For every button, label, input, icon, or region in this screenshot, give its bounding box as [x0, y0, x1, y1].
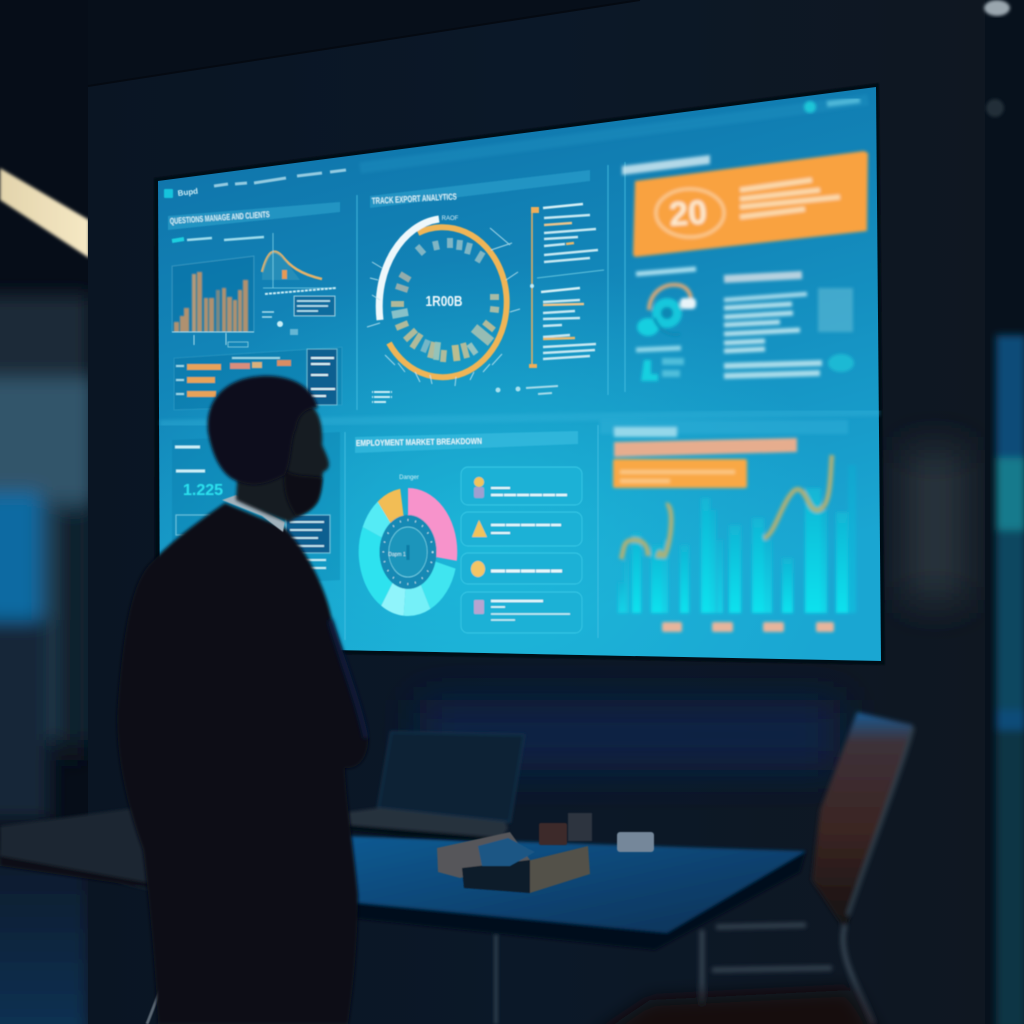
donut chart — [353, 481, 463, 623]
wall reflections — [420, 450, 965, 770]
notes block 2 — [541, 288, 596, 359]
panel: right text notes — [529, 204, 604, 368]
bars — [618, 465, 856, 613]
heading — [622, 155, 710, 175]
notes block 1 — [543, 204, 598, 262]
donut label: Danger — [399, 475, 419, 481]
list card 1 — [461, 467, 582, 505]
wall screen dashboard — [158, 87, 881, 661]
panel: bar chart with trend line — [600, 420, 856, 632]
top navigation bar — [164, 170, 346, 198]
right corridor — [984, 0, 1024, 1024]
cup — [539, 823, 567, 845]
candlestick bar chart — [172, 256, 254, 347]
icon: arc and cyan figure — [637, 285, 696, 336]
hair — [208, 376, 318, 484]
wall top shadow line — [88, 0, 640, 86]
gold trend line — [621, 455, 832, 559]
vertical dividers — [345, 162, 625, 640]
list card 2 — [461, 512, 582, 546]
man silhouette — [117, 376, 368, 1024]
ring heading: TRACK EXPORT ANALYTICS — [372, 192, 457, 206]
box with books — [437, 832, 530, 878]
panel: donut and list — [353, 431, 582, 633]
desk — [0, 806, 806, 1024]
outer ticks — [367, 228, 520, 386]
collar — [222, 495, 285, 532]
x axis labels — [662, 622, 834, 632]
pink caption — [614, 438, 797, 457]
panel heading — [168, 202, 340, 230]
chair leg behind man — [147, 983, 163, 1024]
panel: left upper analytics — [168, 202, 342, 410]
pen holder — [568, 813, 592, 841]
background room on the left — [0, 0, 95, 1024]
orange ring — [389, 227, 507, 377]
top right tag — [804, 100, 860, 113]
list card 3 — [461, 553, 582, 584]
panel: left lower metrics — [172, 432, 340, 590]
coat and legs — [117, 503, 368, 1024]
curve chart — [262, 233, 336, 294]
orange callout: 20 — [668, 193, 708, 234]
screen surface — [158, 87, 881, 661]
phone — [617, 832, 654, 852]
ring heading — [370, 170, 590, 208]
heading bar — [600, 420, 848, 434]
heading: EMPLOYMENT MARKET BREAKDOWN — [356, 436, 482, 448]
grey panel block — [818, 288, 853, 332]
heading — [355, 431, 578, 453]
laptop — [348, 732, 524, 842]
text lines — [724, 275, 822, 376]
neck and face — [236, 400, 329, 522]
top navigation bar: Bupd — [177, 187, 199, 198]
small info box — [262, 296, 335, 335]
panel: ring gauge — [367, 170, 590, 402]
cyan pill — [828, 354, 854, 372]
inner segments — [391, 238, 499, 362]
list card 4 — [461, 592, 582, 633]
panel: top right highlights — [622, 151, 868, 381]
icon: cyan boot — [641, 360, 658, 381]
desk objects — [437, 813, 654, 893]
horizontal panel separator — [160, 412, 880, 424]
ring legend — [372, 386, 558, 402]
orange callout — [633, 151, 868, 257]
gauge top label: RAOF — [442, 216, 459, 222]
screen bezel — [154, 83, 885, 665]
orange caption — [613, 459, 747, 488]
centre value: 1R00B — [426, 293, 463, 310]
donut centre labels: Dapm 1 — [388, 552, 406, 558]
white arc — [379, 219, 439, 320]
ceiling light strip — [0, 168, 89, 258]
bar table — [174, 347, 342, 410]
desk legs — [494, 935, 498, 1024]
coat highlights — [330, 620, 366, 738]
chair — [590, 712, 913, 1024]
beard — [284, 470, 322, 516]
panel: left lower metrics: 1.225 — [183, 482, 223, 499]
panel heading: QUESTIONS MANAGE AND CLIENTS — [169, 209, 270, 226]
